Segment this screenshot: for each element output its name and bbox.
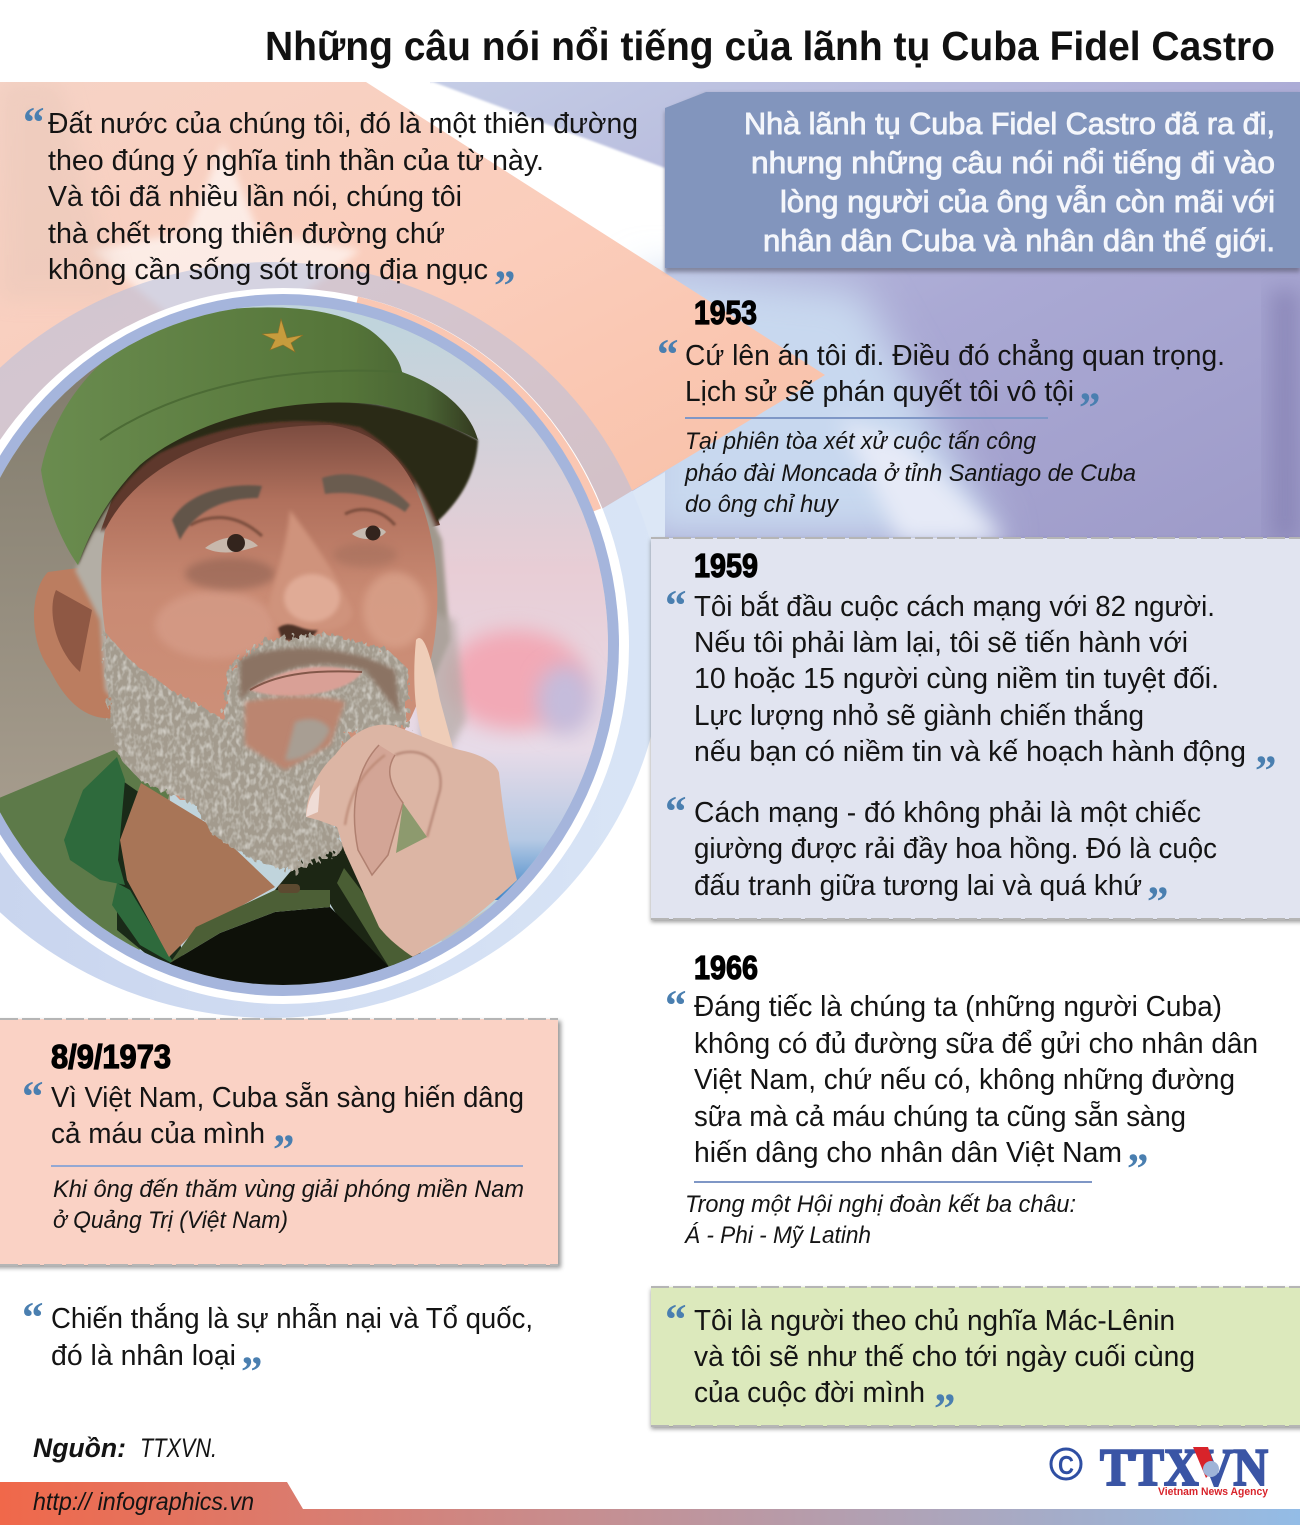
quote: 1966 bbox=[665, 949, 1258, 1249]
quote: 1953: do ông chỉ huy bbox=[685, 491, 840, 518]
panel: 1959: “ bbox=[665, 789, 686, 836]
quote: 1953: Lịch sử sẽ phán quyết tôi vô tội bbox=[685, 376, 1074, 408]
cheek shading and nose bbox=[155, 591, 275, 659]
flag background bbox=[0, 82, 1300, 543]
quote: 1953: ” bbox=[1079, 385, 1100, 432]
eyes bbox=[205, 537, 258, 552]
panel: 8/9/1973: “ bbox=[22, 1074, 44, 1121]
panel: green quote: của cuộc đời mình bbox=[694, 1377, 925, 1409]
panel: green quote: Tôi là người theo chủ nghĩa Mác-Lênin bbox=[694, 1305, 1175, 1337]
portrait rings bbox=[0, 262, 664, 1018]
watch bbox=[441, 908, 488, 942]
footer bar: http:// infographics.vn bbox=[33, 1488, 254, 1516]
intro callout: lòng người của ông vẫn còn mãi với bbox=[780, 184, 1275, 219]
cap star bbox=[262, 319, 303, 352]
portrait photo: Fidel Castro bbox=[0, 300, 620, 1000]
quote: 1966: “ bbox=[665, 983, 686, 1030]
intro callout bbox=[665, 92, 1300, 272]
quote: 1953 bbox=[657, 294, 1225, 518]
quote: 1966: 1966 bbox=[694, 949, 758, 986]
ear bbox=[34, 568, 118, 718]
intro callout: nhưng những câu nói nổi tiếng đi vào bbox=[751, 145, 1275, 180]
panel: 1959: Lực lượng nhỏ sẽ giành chiến thắng bbox=[694, 700, 1144, 732]
panel: 1959: ” bbox=[1147, 879, 1168, 926]
logo: TTXVN: TTXVN bbox=[1100, 1439, 1268, 1497]
panel: 1959: 10 hoặc 15 người cùng niềm tin tuyệt đối. bbox=[694, 663, 1219, 695]
quote: 1953: Tại phiên tòa xét xử cuộc tấn công bbox=[685, 428, 1037, 455]
quote: 1953: 1953 bbox=[694, 294, 757, 331]
panel: 1959: “ bbox=[665, 583, 686, 630]
title bbox=[0, 0, 1300, 82]
logo: TTXVN: Vietnam News Agency bbox=[1158, 1486, 1269, 1498]
cap bbox=[41, 307, 478, 565]
quote: heaven: thà chết trong thiên đường chứ bbox=[48, 218, 445, 250]
quote: 1966: Á - Phi - Mỹ Latinh bbox=[684, 1222, 871, 1249]
quote: heaven: không cần sống sót trong địa ngục bbox=[48, 254, 488, 286]
quote: 1966: Đáng tiếc là chúng ta (những người Cuba) bbox=[694, 991, 1222, 1023]
quote: 1953: Cứ lên án tôi đi. Điều đó chẳng quan trọng. bbox=[685, 339, 1225, 372]
panel: 1959: ” bbox=[1255, 748, 1276, 795]
panel: 8/9/1973 bbox=[0, 1019, 561, 1268]
hand bbox=[414, 638, 453, 748]
footer bar bbox=[0, 1482, 1300, 1525]
panel: green quote: và tôi sẽ như thế cho tới ngày cuối cùng bbox=[694, 1341, 1195, 1373]
quote: victory: đó là nhân loại bbox=[51, 1340, 236, 1372]
quote: 1966: Việt Nam, chứ nếu có, không những đường bbox=[694, 1064, 1235, 1096]
quote: heaven: theo đúng ý nghĩa tinh thần của từ này. bbox=[48, 145, 544, 177]
quote: victory bbox=[22, 1295, 533, 1396]
panel: green quote: “ bbox=[665, 1297, 686, 1344]
quote: heaven: Đất nước của chúng tôi, đó là một thiên đường bbox=[48, 108, 638, 140]
panel: 8/9/1973: ” bbox=[273, 1127, 294, 1174]
quote: 1966: sữa mà cả máu chúng ta cũng sẵn sàng bbox=[694, 1101, 1186, 1133]
panel: 8/9/1973: ở Quảng Trị (Việt Nam) bbox=[53, 1207, 288, 1234]
panel: 1959: nếu bạn có niềm tin và kế hoạch hành động bbox=[694, 736, 1246, 768]
eyebrows bbox=[172, 485, 262, 540]
title: Những câu nói nổi tiếng của lãnh tụ Cuba Fidel Castro bbox=[265, 23, 1275, 69]
panel: 8/9/1973: Khi ông đến thăm vùng giải phóng miền Nam bbox=[53, 1176, 524, 1203]
panel: green quote: ” bbox=[934, 1386, 956, 1433]
panel: 1959: Tôi bắt đầu cuộc cách mạng với 82 người. bbox=[694, 591, 1215, 623]
quote: 1953: pháo đài Moncada ở tỉnh Santiago de Cuba bbox=[684, 460, 1136, 487]
source bbox=[33, 1433, 217, 1463]
cap underside bbox=[78, 400, 478, 565]
source: Nguồn: bbox=[33, 1433, 126, 1463]
quote: 1966: Trong một Hội nghị đoàn kết ba châu: bbox=[685, 1191, 1076, 1218]
quote: heaven bbox=[23, 100, 638, 310]
quote: 1953: “ bbox=[657, 332, 678, 379]
quote: victory: “ bbox=[22, 1295, 44, 1342]
jacket bbox=[319, 846, 421, 972]
beard bbox=[103, 630, 408, 872]
panel: green quote bbox=[651, 1287, 1300, 1433]
quote: heaven: “ bbox=[23, 100, 44, 147]
panel: 1959: 1959 bbox=[694, 547, 758, 584]
panel: 1959: Cách mạng - đó không phải là một chiếc bbox=[694, 797, 1201, 829]
chin bbox=[245, 697, 345, 770]
quote: 1966: ” bbox=[1127, 1146, 1148, 1193]
quote: victory: Chiến thắng là sự nhẫn nại và Tổ quốc, bbox=[51, 1303, 533, 1335]
panel: 8/9/1973: 8/9/1973 bbox=[51, 1038, 171, 1075]
shoulder and collar bbox=[0, 750, 170, 950]
quote: 1966: không có đủ đường sữa để gửi cho nhân dân bbox=[694, 1028, 1258, 1060]
panel: 1959: Nếu tôi phải làm lại, tôi sẽ tiến hành với bbox=[694, 627, 1188, 659]
quote: heaven: Và tôi đã nhiều lần nói, chúng tôi bbox=[48, 181, 462, 213]
quote: heaven: ” bbox=[494, 263, 516, 310]
panel: 1959 bbox=[651, 538, 1300, 926]
source: TTXVN. bbox=[140, 1433, 217, 1463]
panel: 1959: đấu tranh giữa tương lai và quá khứ bbox=[694, 870, 1142, 902]
grey hair bbox=[74, 527, 112, 700]
panel: 8/9/1973: Vì Việt Nam, Cuba sẵn sàng hiến dâng bbox=[51, 1082, 524, 1114]
quote: 1966: hiến dâng cho nhân dân Việt Nam bbox=[694, 1137, 1122, 1169]
neck bbox=[120, 783, 275, 957]
forehead shadow under cap bbox=[100, 410, 440, 532]
panel: 1959: giường được rải đầy hoa hồng. Đó là cuộc bbox=[694, 833, 1217, 865]
lips bbox=[250, 667, 362, 696]
face bbox=[101, 425, 437, 800]
panel: 8/9/1973: cả máu của mình bbox=[51, 1118, 265, 1150]
intro callout: nhân dân Cuba và nhân dân thế giới. bbox=[763, 223, 1275, 258]
intro callout: Nhà lãnh tụ Cuba Fidel Castro đã ra đi, bbox=[744, 106, 1275, 141]
quote: victory: ” bbox=[241, 1349, 262, 1396]
logo: TTXVN: C bbox=[1058, 1450, 1074, 1480]
